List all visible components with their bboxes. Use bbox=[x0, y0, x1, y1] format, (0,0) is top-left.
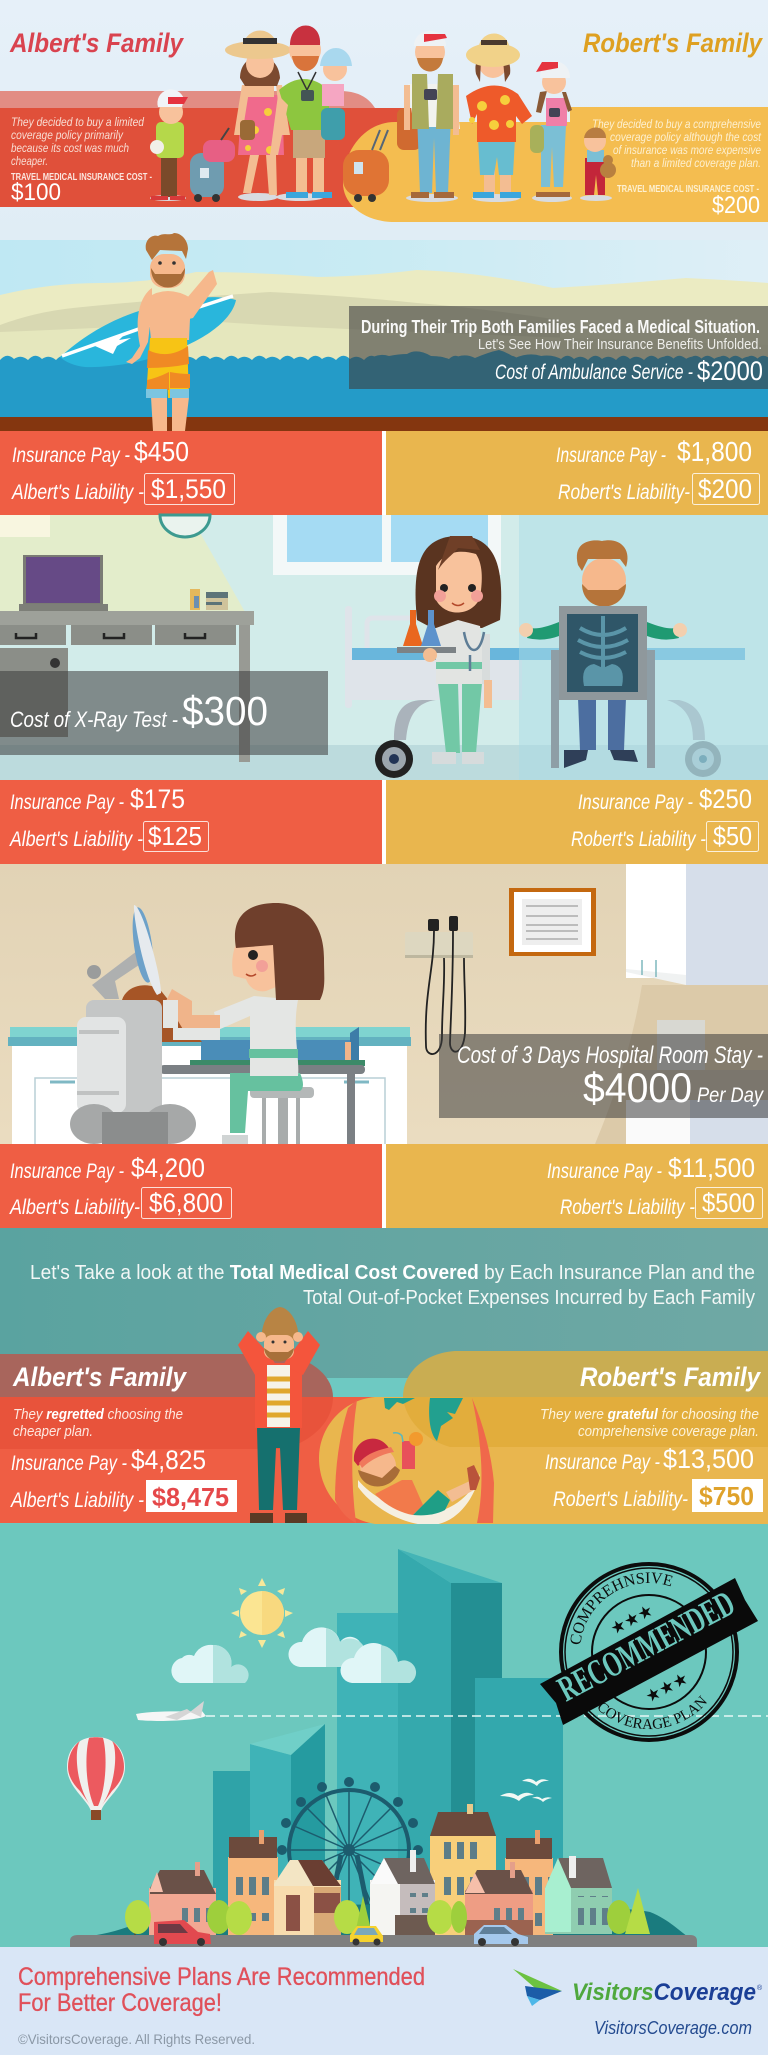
panel: x-ray cost callout: Cost of X-Ray Test - bbox=[10, 707, 178, 732]
figure: father with child bbox=[270, 26, 352, 201]
text: Albert's regret: They regretted choosing the bbox=[13, 1406, 183, 1423]
Albert's ambulance cost: $1,550 bbox=[151, 474, 226, 504]
illustration: wall and cabinets bbox=[0, 864, 768, 1144]
Robert's totals: Insurance Pay - bbox=[545, 1451, 660, 1474]
website url: VisitorsCoverage.com bbox=[594, 2018, 752, 2038]
Robert's hospital cost: $11,500 bbox=[668, 1153, 755, 1183]
band: Robert's summary bbox=[319, 1351, 768, 1524]
stamp: recommended: ★★★ bbox=[607, 1600, 657, 1640]
Robert's ambulance cost: Robert's Liability- bbox=[558, 481, 690, 504]
text: Robert's decision bbox=[592, 117, 762, 170]
house: cream bbox=[274, 1860, 341, 1936]
text: Albert's insurance cost: $100 bbox=[11, 179, 61, 206]
panel: x-ray cost callout bbox=[0, 671, 328, 755]
Albert's ambulance cost: Albert's Liability - bbox=[10, 481, 144, 504]
stamp: recommended: COMPREHNSIVE bbox=[570, 1572, 673, 1644]
panel: ambulance cost split bbox=[0, 431, 768, 515]
Robert's hospital cost: $500 bbox=[702, 1188, 755, 1218]
panel: footer bbox=[0, 1947, 768, 2055]
Albert's x-ray cost: $175 bbox=[130, 784, 185, 814]
Robert's hospital cost bbox=[386, 1144, 768, 1228]
title: Albert's Family: Albert's Family bbox=[9, 28, 185, 58]
road bbox=[70, 1935, 697, 1947]
band: Albert's summary bbox=[0, 1354, 385, 1523]
illustration: Robert's family bbox=[343, 31, 616, 202]
logo: VisitorsCoverage: ® bbox=[757, 1984, 763, 1992]
Robert's totals: Robert's Liability- bbox=[553, 1488, 688, 1511]
Robert's totals: $750 bbox=[699, 1481, 754, 1511]
text: Robert's insurance cost: $200 bbox=[712, 192, 760, 219]
panel: total cost comparison bbox=[0, 1228, 768, 1525]
Albert's hospital cost: Insurance Pay - bbox=[10, 1160, 124, 1183]
illustration: ultrasound machine bbox=[70, 905, 196, 1144]
text: Albert's decision: coverage policy primarily bbox=[11, 128, 124, 142]
text: Albert's regret: cheaper plan. bbox=[13, 1423, 93, 1440]
text: Albert's decision: because its cost was much bbox=[11, 141, 129, 155]
Albert's hospital cost bbox=[0, 1144, 382, 1228]
illustration: room background bbox=[0, 515, 768, 780]
Albert's hospital cost: $6,800 bbox=[149, 1188, 223, 1218]
Albert's totals bbox=[9, 1445, 237, 1512]
Robert's ambulance cost: Insurance Pay - bbox=[556, 444, 666, 467]
Robert's x-ray cost: Insurance Pay - bbox=[578, 791, 693, 814]
icon: hot air balloon bbox=[67, 1737, 125, 1820]
Albert's ambulance cost bbox=[0, 431, 382, 515]
copyright: ©VisitorsCoverage. All Rights Reserved. bbox=[18, 2031, 255, 2047]
text: Albert's decision: They decided to buy a limited bbox=[11, 115, 144, 129]
stamp: recommended: COVERAGE PLAN bbox=[598, 1695, 707, 1730]
Robert's x-ray cost: $250 bbox=[699, 784, 752, 814]
icon: yellow car bbox=[350, 1926, 383, 1946]
panel: family introduction bbox=[0, 0, 768, 240]
curtain bbox=[519, 515, 768, 780]
panel: hospital stay cost callout bbox=[439, 1034, 768, 1118]
hammock ropes bbox=[335, 1400, 357, 1523]
panel: hospital stay cost split bbox=[0, 1144, 768, 1228]
text: Albert's decision bbox=[11, 115, 144, 168]
figure: boy bbox=[150, 89, 188, 201]
figure: man behind x-ray screen bbox=[519, 540, 687, 768]
Robert's hospital cost: Robert's Liability - bbox=[560, 1196, 695, 1219]
icon: airplane bbox=[136, 1701, 206, 1721]
illustration: exam bed bbox=[8, 985, 411, 1144]
heading: total medical cost bbox=[30, 1262, 755, 1309]
yellow band: Robert's family bbox=[343, 107, 768, 222]
Albert's x-ray cost: Albert's Liability - bbox=[8, 828, 143, 851]
panel: situation callout: Cost of Ambulance Service - bbox=[495, 361, 693, 384]
house: pink bbox=[149, 1862, 216, 1936]
icon: clouds bbox=[171, 1627, 416, 1683]
panel: x-ray room bbox=[0, 515, 768, 780]
figure: father in vest bbox=[397, 31, 460, 202]
house: mint bbox=[545, 1856, 612, 1934]
text: Albert's insurance cost bbox=[11, 171, 152, 206]
Albert's x-ray cost: $125 bbox=[148, 821, 202, 851]
Albert's hospital cost: Albert's Liability- bbox=[8, 1196, 140, 1219]
Albert's hospital cost: $4,200 bbox=[131, 1153, 205, 1183]
heading: recommendation: For Better Coverage! bbox=[18, 1989, 222, 2017]
house: orange tall left bbox=[228, 1830, 278, 1936]
illustration: skyscrapers bbox=[213, 1549, 563, 1933]
logo: VisitorsCoverage bbox=[513, 1969, 763, 2006]
stamp: recommended bbox=[540, 1562, 758, 1742]
illustration: desk with laptop bbox=[0, 555, 254, 762]
Robert's x-ray cost: Robert's Liability - bbox=[571, 828, 706, 851]
figure: technician on stool bbox=[163, 903, 324, 1144]
illustration: coast landscape bbox=[0, 240, 768, 431]
figure: surfer with board bbox=[60, 233, 236, 431]
palm leaves bbox=[384, 1398, 463, 1441]
icon: wall clock bbox=[160, 515, 210, 537]
icon: red car bbox=[154, 1920, 211, 1946]
text: Robert's insurance cost bbox=[617, 183, 760, 219]
illustration: Albert's family bbox=[150, 26, 352, 202]
house: yellow tall center bbox=[430, 1804, 496, 1936]
figure: nurse with flasks bbox=[397, 536, 501, 764]
panel: hospital room bbox=[0, 864, 768, 1144]
Albert's ambulance cost: Insurance Pay - bbox=[12, 444, 130, 467]
panel: recommended city scene bbox=[0, 1524, 768, 1947]
logo: VisitorsCoverage: VisitorsCoverage bbox=[572, 1979, 756, 2006]
text: Albert's regret bbox=[13, 1406, 183, 1440]
text: Robert's gratitude bbox=[540, 1406, 759, 1440]
Robert's totals bbox=[545, 1444, 763, 1512]
dashed flight path bbox=[206, 1715, 768, 1717]
panel: situation callout bbox=[349, 306, 768, 389]
illustration: ferris wheel bbox=[277, 1777, 423, 1925]
Robert's ambulance cost: $200 bbox=[698, 474, 752, 504]
icon: birds bbox=[500, 1779, 552, 1802]
reclining man's head bbox=[360, 1448, 396, 1484]
heading: total medical cost: Let's Take a look at the Total Medical Cost Covered by Each Insurance Plan and the bbox=[30, 1262, 755, 1284]
house: orange right bbox=[505, 1830, 553, 1936]
red band: Albert's family bbox=[0, 91, 410, 207]
hammock bbox=[358, 1473, 480, 1525]
figure: girl bbox=[530, 62, 572, 202]
icon: orange suitcase bbox=[343, 130, 389, 202]
panel: hospital stay cost callout: $4000 bbox=[583, 1064, 692, 1111]
illustration: hospital bed bbox=[345, 606, 745, 778]
illustration: man relaxing in hammock bbox=[335, 1398, 494, 1525]
Robert's hospital cost: Insurance Pay - bbox=[547, 1160, 662, 1183]
figure: woman with sun hat bbox=[225, 30, 291, 201]
text: Robert's gratitude: They were grateful for choosing the bbox=[540, 1406, 759, 1423]
heading: recommendation bbox=[18, 1963, 425, 2017]
stamp: recommended: ★★★ bbox=[642, 1668, 692, 1708]
Robert's ambulance cost bbox=[386, 431, 768, 515]
house: white and grey bbox=[370, 1850, 435, 1936]
house: salmon bbox=[465, 1862, 533, 1936]
Albert's x-ray cost: Insurance Pay - bbox=[10, 791, 124, 814]
heading: recommendation: Comprehensive Plans Are Recommended bbox=[18, 1963, 425, 1991]
icon: wall-mounted scope bbox=[405, 916, 473, 1054]
panel: medical situation intro with surfer bbox=[0, 233, 768, 431]
figure: worried man bbox=[238, 1307, 320, 1523]
Albert's x-ray cost bbox=[0, 780, 382, 864]
icon: framed chart bbox=[509, 888, 596, 956]
Albert's ambulance cost: $450 bbox=[134, 436, 189, 467]
text: Albert's decision: cheaper. bbox=[11, 154, 48, 168]
Robert's totals: $13,500 bbox=[663, 1444, 754, 1474]
title: Albert's Family: Albert's Family bbox=[12, 1362, 188, 1392]
illustration: trees bbox=[125, 1888, 650, 1936]
text: Albert's insurance cost: TRAVEL MEDICAL INSURANCE COST - bbox=[11, 171, 152, 183]
Robert's ambulance cost: $1,800 bbox=[677, 436, 752, 467]
icon: sun bbox=[231, 1578, 293, 1648]
Albert's totals: $4,825 bbox=[131, 1445, 206, 1475]
Albert's totals: $8,475 bbox=[152, 1482, 229, 1512]
icon: blue car bbox=[474, 1925, 528, 1946]
figure: mother in flower shirt bbox=[466, 34, 532, 202]
Robert's x-ray cost: $50 bbox=[713, 821, 752, 851]
Robert's x-ray cost bbox=[386, 780, 768, 864]
panel: x-ray cost callout: $300 bbox=[182, 688, 268, 734]
figure: small boy with teddy bbox=[580, 128, 616, 201]
Albert's totals: Insurance Pay - bbox=[11, 1452, 127, 1475]
icon: blue suitcase and pink bag bbox=[190, 128, 235, 202]
Albert's totals: Albert's Liability - bbox=[9, 1489, 144, 1512]
icon: logo arrow bbox=[513, 1969, 562, 2006]
illustration: town bbox=[70, 1804, 690, 1938]
panel: x-ray cost split bbox=[0, 780, 768, 864]
